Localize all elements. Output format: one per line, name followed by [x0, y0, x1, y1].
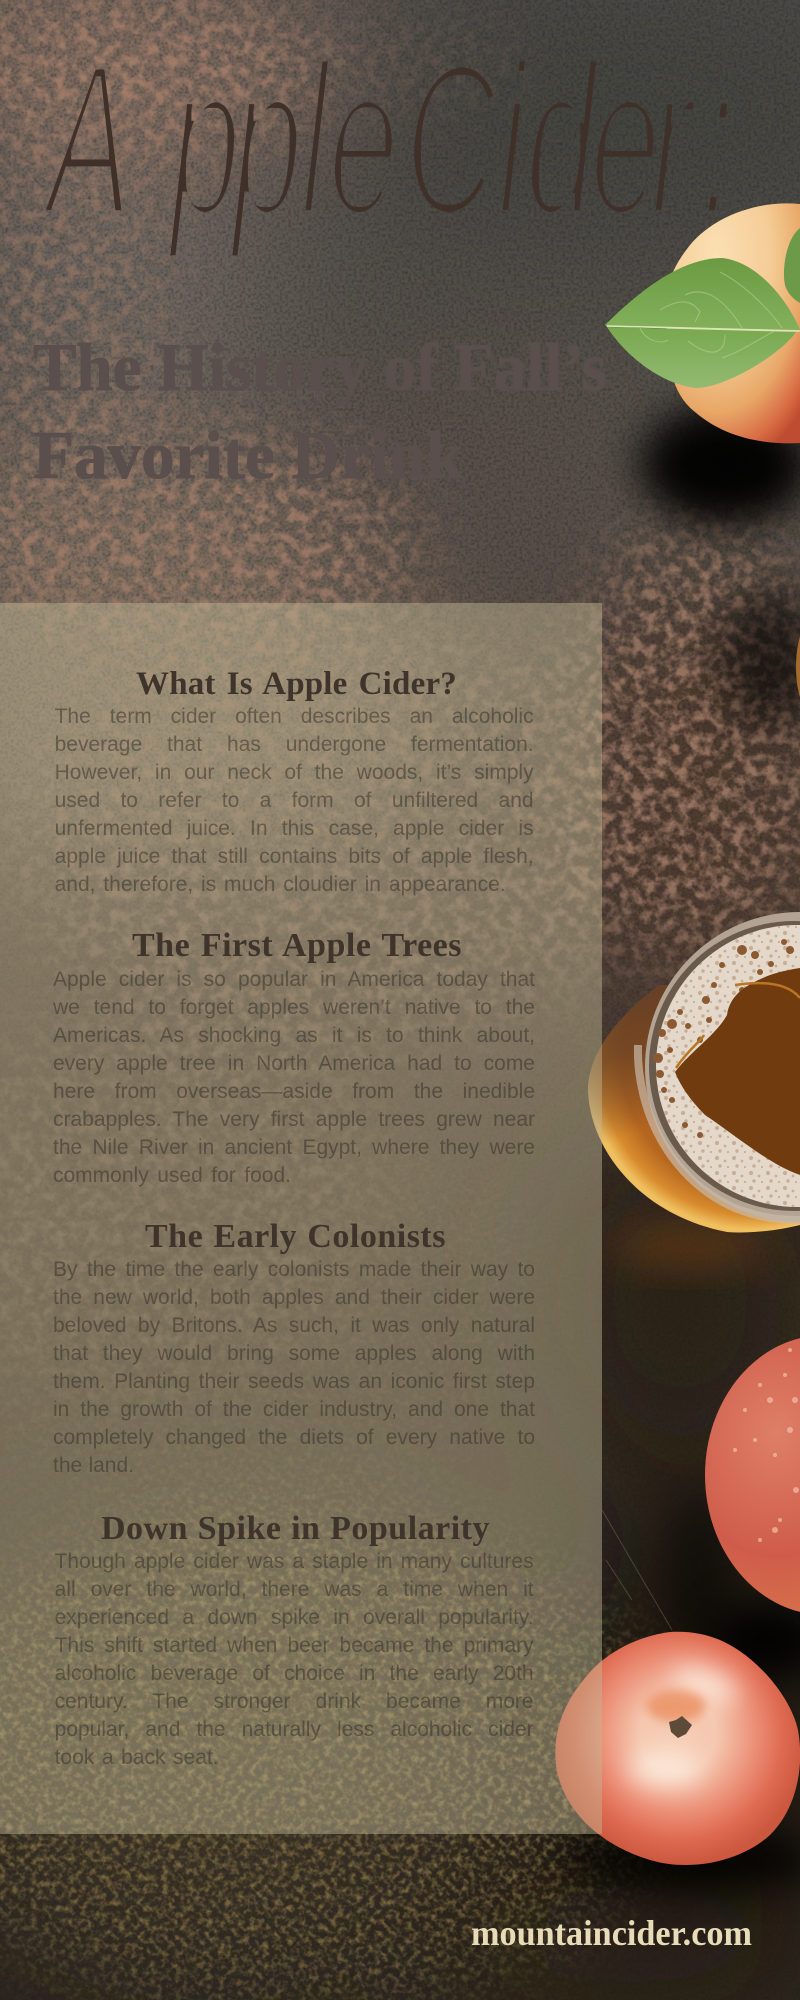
text block: early colonists: the land. [53, 1454, 134, 1477]
text block: what is apple cider: apple juice that still contains bits of apple flesh, [55, 845, 534, 868]
apple highlights [629, 1658, 742, 1786]
text block: down spike: alcoholic beverage of choice in the early 20th [55, 1662, 534, 1685]
foam bubbles [653, 939, 794, 1138]
text block: what is apple cider: and, therefore, is much cloudier in appearance. [55, 873, 506, 896]
text block: down spike: popular, and the naturally less alcoholic cider [55, 1718, 534, 1741]
red apple, right [705, 1335, 800, 1615]
heading: What Is Apple Cider?: What Is Apple Cider? [136, 666, 457, 702]
text block: down spike: century. The stronger drink became more [55, 1690, 534, 1713]
table scratches [602, 1510, 672, 1630]
text block: first apple trees: Apple cider is so popular in America today that [53, 968, 535, 991]
glass of apple cider [588, 912, 800, 1233]
text block: early colonists [53, 1258, 535, 1477]
text block: what is apple cider: used to refer to a form of unfiltered and [55, 789, 534, 812]
text block: early colonists: them. Planting their seeds was an iconic first step [53, 1370, 535, 1393]
second leaf [784, 228, 800, 303]
text block: what is apple cider: However, in our neck of the woods, it’s simply [55, 761, 534, 784]
text block: early colonists: that they would bring some apples along with [53, 1342, 535, 1365]
text block: first apple trees: here from overseas—aside from the inedible [53, 1080, 535, 1103]
text block: early colonists: beloved by Britons. As such, it was only natural [53, 1314, 535, 1337]
text block: what is apple cider: beverage that has undergone fermentation. [55, 733, 534, 756]
text block: first apple trees: we tend to forget apples weren’t native to the [53, 996, 535, 1019]
text block: down spike [55, 1550, 534, 1769]
text block: first apple trees: every apple tree in North America had to come [53, 1052, 535, 1075]
calyx glow [646, 1690, 706, 1722]
text block: what is apple cider: The term cider often describes an alcoholic [55, 705, 534, 728]
foam [656, 925, 800, 1207]
text block: first apple trees [53, 968, 535, 1187]
subtitle: The History of Fall’s [33, 329, 607, 405]
apple stem [669, 1716, 692, 1738]
text block: what is apple cider: unfermented juice. In this case, apple cider is [55, 817, 534, 840]
text block: first apple trees: crabapples. The very first apple trees grew near [53, 1108, 535, 1131]
text block: first apple trees: the Nile River in ancient Egypt, where they were [53, 1136, 535, 1159]
subtitle [33, 329, 607, 493]
cider surface [675, 968, 800, 1175]
heading: Down Spike in Popularity: Down Spike in Popularity [101, 1510, 490, 1546]
large leaf [605, 258, 800, 388]
cider highlight [676, 983, 800, 1068]
text block: first apple trees: commonly used for food. [53, 1164, 291, 1187]
footer website: mountaincider.com [471, 1913, 752, 1953]
text block: down spike: all over the world, there was a time when it [55, 1578, 534, 1601]
text block: first apple trees: Americas. As shocking as it is to think about, [53, 1024, 535, 1047]
apple skin speckles [733, 1348, 799, 1542]
heading: The Early Colonists: The Early Colonists [145, 1218, 446, 1254]
glass base [588, 985, 800, 1233]
red apple, bottom [555, 1632, 800, 1865]
text block: early colonists: By the time the early colonists made their way to [53, 1258, 535, 1281]
apple with leaves [605, 203, 800, 443]
text block: down spike: Though apple cider was a staple in many cultures [55, 1550, 534, 1573]
panel: history text on translucent beige [0, 603, 602, 1834]
object shadows [560, 403, 800, 1892]
title: Apple Cider:: Apple Cider: [40, 18, 736, 261]
apple body [665, 203, 800, 443]
text block: down spike: experienced a down spike in overall popularity. [55, 1606, 534, 1629]
text block: early colonists: the new world, both apples and their cider were [53, 1286, 535, 1309]
text block: down spike: took a back seat. [55, 1746, 219, 1769]
cider glow on table [610, 1223, 770, 1267]
text block: early colonists: completely changed the diets of every native to [53, 1426, 535, 1449]
glass rim bright arc [638, 1045, 800, 1220]
text block: early colonists: in the growth of the cider industry, and one that [53, 1398, 535, 1421]
subtitle: Favorite Drink [33, 417, 463, 493]
text block: what is apple cider [55, 705, 534, 896]
glass rim [645, 912, 800, 1222]
apple sliver at right edge [796, 621, 800, 713]
heading: The First Apple Trees: The First Apple Trees [132, 926, 462, 964]
text block: down spike: This shift started when beer became the primary [55, 1634, 534, 1657]
